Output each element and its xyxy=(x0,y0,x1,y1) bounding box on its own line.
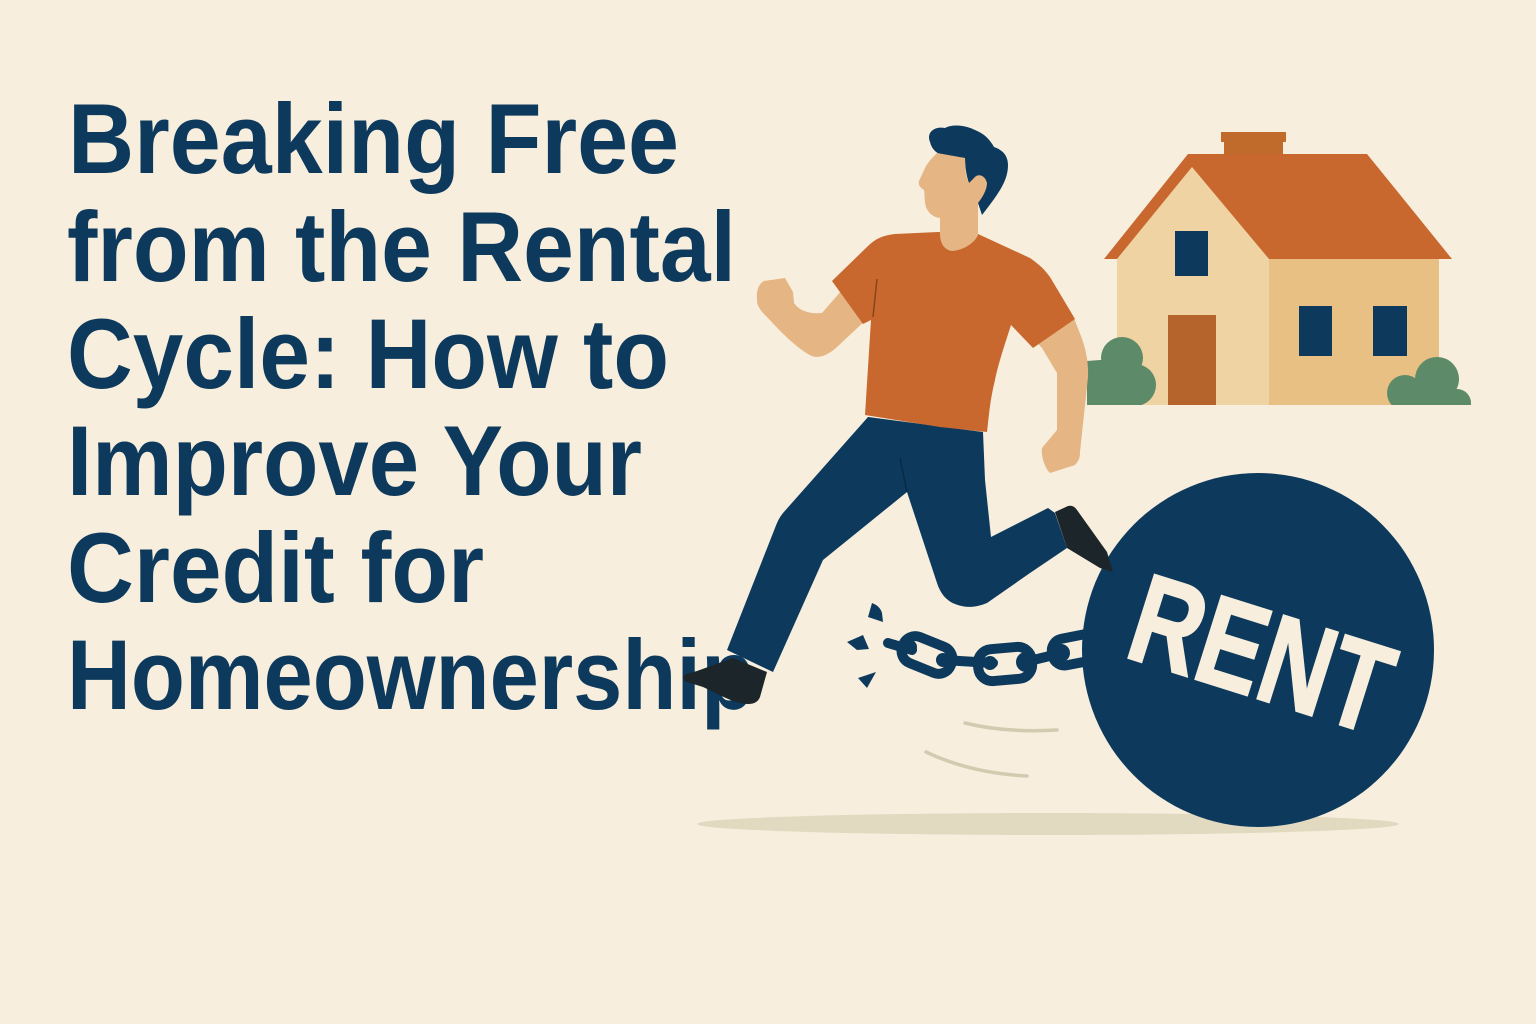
title: Cycle: How to xyxy=(67,298,669,409)
lower window left xyxy=(1299,306,1332,356)
ball xyxy=(1082,473,1434,827)
roof xyxy=(1104,154,1452,259)
infographic canvas xyxy=(68,101,1471,835)
chain knobs xyxy=(903,640,1070,672)
chain links xyxy=(898,631,1104,682)
left arm xyxy=(757,278,868,357)
shirt fold xyxy=(873,279,877,317)
hair xyxy=(929,126,1008,215)
chimney xyxy=(1221,132,1286,156)
broken chain xyxy=(847,603,1104,688)
upper window xyxy=(1175,231,1208,276)
left bush xyxy=(1087,337,1156,406)
title: from the Rental xyxy=(67,191,736,302)
house right wall xyxy=(1269,259,1439,405)
right arm xyxy=(1030,318,1088,473)
right bush xyxy=(1387,357,1471,405)
title xyxy=(67,83,755,730)
trouser crease xyxy=(900,458,907,492)
title: Homeownership xyxy=(67,619,755,730)
trousers xyxy=(727,417,1067,672)
title: Improve Your xyxy=(67,405,642,516)
back shoe xyxy=(1055,506,1113,572)
face and neck xyxy=(919,153,987,251)
running man xyxy=(683,126,1113,704)
ball body xyxy=(1082,473,1434,827)
motion lines xyxy=(926,723,1057,776)
title: Breaking Free xyxy=(68,83,679,194)
house xyxy=(1087,132,1471,417)
shirt xyxy=(832,232,1075,432)
lower window right xyxy=(1373,306,1407,356)
front shoe xyxy=(683,658,767,704)
ball label: RENT xyxy=(1114,546,1409,761)
door xyxy=(1168,315,1216,405)
chain connectors xyxy=(888,643,1062,663)
chain fragments xyxy=(847,603,883,688)
house left wall xyxy=(1117,167,1269,405)
title: Credit for xyxy=(67,512,484,623)
ground shadow xyxy=(697,813,1399,835)
